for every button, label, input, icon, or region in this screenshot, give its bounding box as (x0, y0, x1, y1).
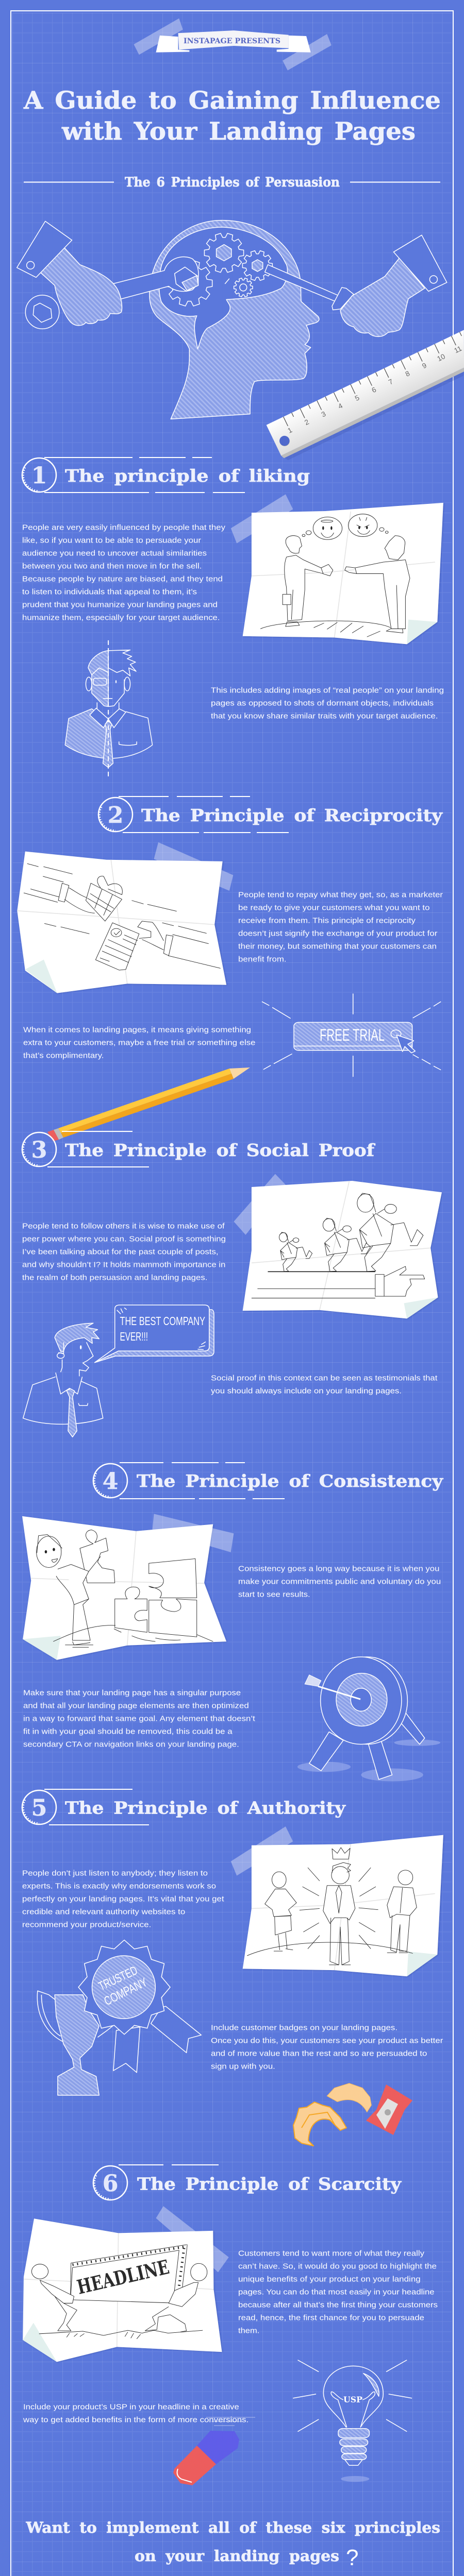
ruler: 4 (337, 402, 344, 411)
icon: trusted company badge: TRUSTED (96, 1963, 140, 1993)
heading 4: The Principle of Consistency (137, 1471, 443, 1491)
section 5: the principle of authority (22, 1789, 443, 2146)
paragraph: customer badges: and of more value than the rest and so are persuaded to (211, 2049, 427, 2058)
section 4: the principle of consistency (22, 1463, 443, 1782)
heading 5: The Principle of Authority (65, 1798, 346, 1818)
right screwdriver (265, 265, 354, 310)
ruler: 2 (303, 418, 310, 427)
paragraph: testimonials (211, 1374, 438, 1395)
banner: Instapage presents: INSTAPAGE PRESENTS (184, 37, 280, 45)
paragraph: liking: People are very easily influenced by people that they (22, 523, 226, 532)
heading 5: 5 (31, 1795, 47, 1821)
heading 6: The Principle of Scarcity (137, 2174, 402, 2194)
paper: headline sign sketch (23, 2206, 229, 2362)
paragraph: landing page extras: that’s complimentary. (23, 1051, 104, 1060)
paragraph: scarcity: because after all that’s the first thing your customers (238, 2301, 438, 2310)
paragraph: repay: their money, but something that your customers can (238, 942, 437, 951)
paper: puzzle sketch (22, 1514, 234, 1660)
section 2: the principle of reciprocity (17, 796, 443, 1141)
paragraph: liking: between you two and then move in for the sell. (22, 562, 202, 571)
icon: free trial button: FREE TRIAL (320, 1026, 385, 1044)
paragraph: singular purpose (23, 1689, 256, 1749)
paragraph: commitments: Consistency goes a long way because it is when you (238, 1564, 439, 1573)
paragraph: real people: This includes adding images of “real people” on your landing (211, 686, 444, 695)
call to action question: on your landing pages (135, 2547, 339, 2565)
paragraph: experts: experts. This is exactly why endorsements work so (22, 1882, 216, 1891)
paragraph: customer badges (211, 2024, 443, 2071)
callout: testimonial speech bubble: THE BEST COMPANY (120, 1314, 205, 1328)
paragraph: liking: audience you need to uncover actual similarities (22, 549, 207, 558)
heading 3 (22, 1131, 375, 1167)
paper: exchange sketch (17, 842, 233, 993)
paragraph: commitments: make your commitments public and voluntary do you (238, 1578, 441, 1586)
icon: half-hatched businessman (65, 640, 153, 779)
paragraph: customer badges: Once you do this, your customers see your product as better (211, 2037, 443, 2045)
paragraph: USP: way to get added benefits in the form of more conversions. (23, 2415, 248, 2424)
title (23, 87, 441, 146)
paragraph: singular purpose: secondary CTA or navigation links on your landing page. (23, 1740, 239, 1749)
icon: USP light bulb: USP (343, 2395, 362, 2404)
left wrench (25, 257, 198, 329)
heading 2: 2 (108, 802, 123, 828)
paragraph: experts: People don’t just listen to anybody; they listen to (22, 1869, 208, 1878)
paragraph: liking: prudent that you humanize your landing pages and (22, 601, 218, 609)
paragraph: testimonials: Social proof in this context can be seen as testimonials that (211, 1374, 438, 1382)
callout: testimonial speech bubble (95, 1305, 214, 1363)
heading 1 (22, 457, 310, 493)
icon: pencil shavings and sharpener (293, 2083, 412, 2146)
heading 2 (98, 796, 443, 833)
paragraph: landing page extras (23, 1025, 255, 1060)
title: with Your Landing Pages (61, 117, 416, 146)
icon: trophy (37, 1991, 114, 2095)
brain cavity (159, 227, 287, 349)
callout: testimonial speech bubble: EVER!!! (120, 1330, 148, 1343)
paragraph: scarcity: Customers tend to want more of what they really (238, 2249, 425, 2258)
paragraph: liking: like, so if you want to be able to persuade your (22, 536, 201, 545)
call to action question: ? (346, 2545, 358, 2570)
heading 3: 3 (31, 1137, 47, 1163)
icon: free trial button (262, 994, 441, 1077)
heading 1: 1 (31, 463, 47, 489)
section 6: the principle of scarcity (23, 2165, 438, 2485)
paragraph: singular purpose: fit in with your goal should be removed, this could be a (23, 1727, 233, 1736)
paragraph: follow others: I’ve been talking about for the past couple of posts, (22, 1247, 219, 1256)
section 3: the principle of social proof (22, 1131, 442, 1437)
paragraph: customer badges: sign up with you. (211, 2062, 275, 2071)
paragraph: scarcity: can’t have. So, it would do you good to highlight the (238, 2262, 437, 2271)
paragraph: USP (23, 2402, 248, 2424)
paragraph: singular purpose: Make sure that your landing page has a singular purpose (23, 1689, 241, 1698)
heading 6: 6 (103, 2171, 118, 2197)
paragraph: scarcity: read, hence, the first chance for you to persuade (238, 2314, 424, 2323)
paragraph: customer badges: Include customer badges on your landing pages. (211, 2024, 397, 2032)
paper: handshake sketch (231, 494, 443, 644)
paragraph: repay: doesn’t just signify the exchange of your product for (238, 929, 437, 938)
heading 4: 4 (103, 1468, 118, 1495)
paragraph: scarcity: pages. You can do that most easily in your headline (238, 2288, 435, 2297)
paragraph: liking (22, 523, 226, 622)
paragraph: singular purpose: and that all your landing page elements are then optimized (23, 1702, 249, 1710)
icon: trusted company badge: COMPANY (102, 1975, 150, 2008)
paragraph: liking: humanize them, especially for your target audience. (22, 614, 220, 622)
paragraph: commitments: start to see results. (238, 1590, 310, 1599)
heading 1: The principle of liking (65, 466, 310, 486)
paragraph: experts: credible and relevant authority websites to (22, 1908, 185, 1917)
head silhouette (150, 221, 319, 419)
left hand and cuff (17, 221, 122, 326)
paragraph: commitments (238, 1564, 441, 1599)
subtitle: the 6 principles of persuasion: The 6 Principles of Persuasion (125, 175, 340, 190)
call to action question (25, 2519, 440, 2570)
paragraph: repay: benefit from. (238, 955, 287, 963)
paragraph: USP: Include your product’s USP in your headline in a creative (23, 2402, 239, 2411)
paragraph: testimonials: you should always include on your landing pages. (211, 1386, 402, 1395)
paragraph: follow others: People tend to follow others it is wise to make use of (22, 1222, 225, 1230)
icon: target with arrow (297, 1657, 440, 1782)
paragraph: real people (211, 686, 444, 721)
ruler: 5 (354, 394, 361, 402)
paragraph: follow others: and why shouldn’t I? It holds mammoth importance in (22, 1260, 225, 1269)
heading 5 (22, 1789, 346, 1825)
paragraph: follow others (22, 1222, 226, 1282)
icon: eraser (173, 2417, 255, 2485)
icon: trusted company badge (78, 1940, 201, 2073)
section 1: the principle of liking (22, 457, 444, 779)
paragraph: experts (22, 1869, 224, 1929)
heading 2: The Principle of Reciprocity (141, 805, 443, 825)
right hand and cuff (340, 235, 447, 336)
heading 4 (93, 1463, 443, 1499)
paragraph: real people: pages as opposed to shots of dormant objects, individuals (211, 699, 434, 708)
paper: running men sketch (234, 1174, 442, 1318)
ruler: 9 (421, 361, 428, 370)
paragraph: repay: receive from them. This principle of reciprocity (238, 916, 416, 925)
paragraph: liking: to listen to individuals that appeal to them, it’s (22, 588, 197, 597)
paragraph: repay: be ready to give your customers what you want to (238, 904, 430, 912)
paragraph: follow others: the realm of both persuasion and landing pages. (22, 1273, 207, 1282)
ruler: 3 (320, 410, 327, 418)
title: A Guide to Gaining Influence (23, 87, 441, 115)
paragraph: experts: perfectly on your landing pages. It’s vital that you get (22, 1895, 224, 1904)
ruler: 11 (453, 345, 463, 354)
paragraph: repay: People tend to repay what they get, so, as a marketer (238, 890, 443, 900)
paragraph: real people: that you know share similar traits with your target audience. (211, 712, 438, 721)
paragraph: experts: recommend your product/service. (22, 1921, 151, 1929)
ruler: 6 (371, 385, 377, 394)
paragraph: liking: Because people by nature are biased, and they tend (22, 575, 223, 584)
paragraph: landing page extras: extra to your customers, maybe a free trial or something else (23, 1039, 255, 1047)
ruler: 7 (387, 378, 394, 386)
ruler: 1 (287, 426, 293, 435)
ruler (267, 330, 464, 462)
ruler: 10 (436, 352, 446, 363)
hero illustration: hands adjusting gears in head (17, 221, 447, 419)
banner: Instapage presents (134, 19, 332, 71)
heading 6 (93, 2165, 402, 2200)
heading 3: The Principle of Social Proof (65, 1140, 375, 1160)
paper: authority figures sketch (231, 1826, 443, 1976)
icon: testimonial character (23, 1323, 103, 1437)
paragraph: scarcity (238, 2249, 438, 2335)
paragraph: landing page extras: When it comes to landing pages, it means giving something (23, 1025, 251, 1035)
paragraph: follow others: peer power where you can. Social proof is something (22, 1234, 226, 1243)
paragraph: singular purpose: in a way to forward that same goal. Any element that doesn’t (23, 1715, 256, 1723)
call to action question: Want to implement all of these six principles (25, 2519, 440, 2536)
paragraph: scarcity: them. (238, 2327, 259, 2335)
paragraph: repay (238, 890, 443, 963)
icon: yellow pencil (47, 1067, 250, 1141)
paper: headline sign sketch: HEADLINE (75, 2255, 171, 2299)
icon: USP light bulb (293, 2360, 412, 2482)
gears (167, 233, 272, 306)
paragraph: scarcity: unique benefits of your product on your landing (238, 2275, 421, 2284)
ruler: 8 (404, 369, 411, 378)
